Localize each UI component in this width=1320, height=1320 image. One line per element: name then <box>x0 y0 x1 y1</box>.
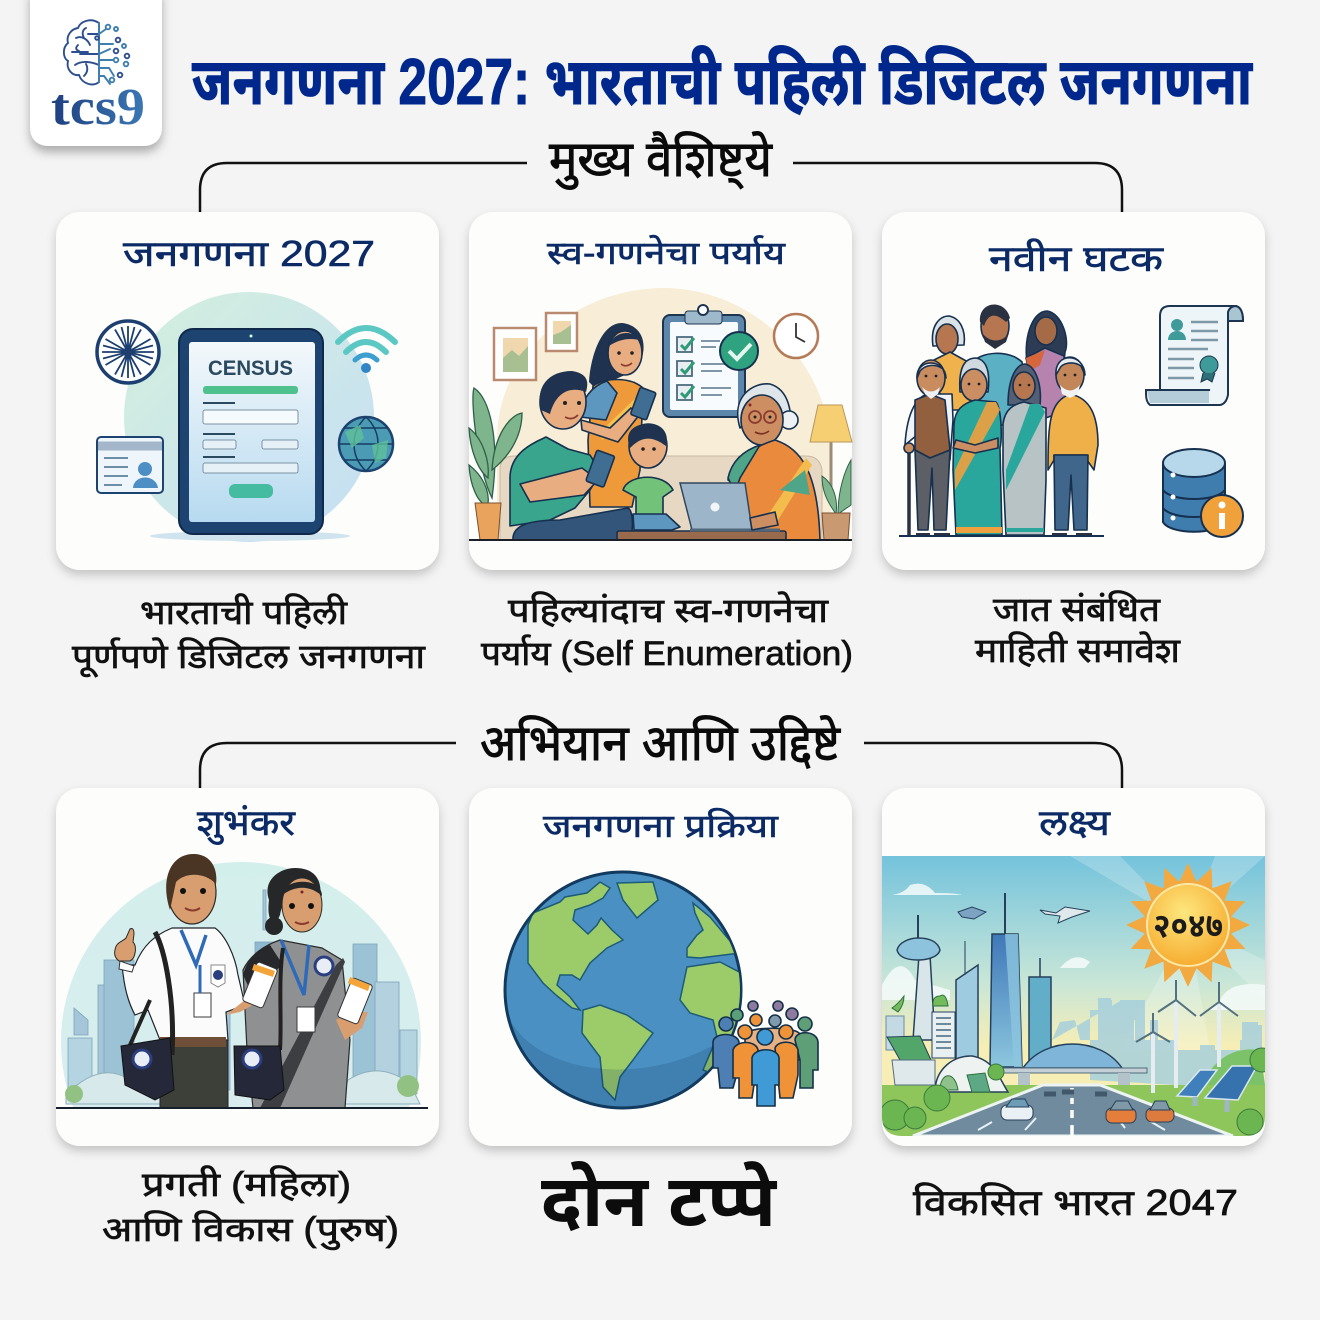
solar roof and dome <box>887 1036 931 1060</box>
planes <box>958 907 986 919</box>
sofa <box>500 456 822 540</box>
clipboard <box>663 315 745 417</box>
caption: census 2027: पूर्णपणे डिजिटल जनगणना <box>72 637 426 677</box>
woman standing <box>589 323 644 388</box>
person blue center <box>752 1050 779 1106</box>
caption: developed India 2047: विकसित भारत 2047 <box>913 1182 1238 1223</box>
caption: new components <box>975 591 1181 670</box>
grandfather in yellow <box>1048 394 1098 470</box>
icon: globe <box>505 872 745 1108</box>
tower <box>913 955 935 1040</box>
card title: शुभंकर <box>197 802 296 845</box>
person orange left <box>733 1042 758 1098</box>
woman <box>1008 364 1040 405</box>
icon: brain circuit <box>64 20 129 84</box>
South America <box>582 1005 653 1100</box>
panel: census process <box>469 788 852 1146</box>
woman mascot <box>243 940 350 1108</box>
Africa <box>680 962 745 1075</box>
illustration: tablet scene: CENSUS <box>208 357 293 380</box>
icon: certificate scroll <box>1146 306 1243 405</box>
plant and pot <box>469 388 522 505</box>
icon: wifi <box>338 328 395 373</box>
person blue left <box>713 1034 739 1088</box>
lamp <box>830 442 832 500</box>
North America <box>528 882 623 1010</box>
caption: mascot: आणि विकास (पुरुष) <box>102 1211 399 1250</box>
clock <box>774 314 818 358</box>
section heading: key features <box>200 131 1122 212</box>
old man <box>905 394 953 460</box>
caption: census 2027: भारताची पहिली <box>140 593 348 632</box>
old woman <box>960 358 989 392</box>
panel: census 2027 <box>56 212 439 570</box>
panel: mascot <box>52 788 444 1156</box>
caption: mascot <box>102 1166 399 1250</box>
icon: group of people <box>713 1001 818 1106</box>
card title: जनगणना प्रक्रिया <box>543 808 779 844</box>
icon: id card <box>97 437 163 493</box>
solar panels <box>1177 1070 1217 1097</box>
sun <box>1126 863 1250 987</box>
person orange right <box>775 1042 798 1098</box>
caption: new components: जात संबंधित <box>993 591 1161 629</box>
icon: database with info <box>1163 449 1243 537</box>
right plant <box>822 460 851 514</box>
clouds <box>882 884 1265 1010</box>
section heading: campaign and objectives: अभियान आणि उद्दिष्टे <box>480 715 841 771</box>
icon: globe <box>339 417 393 471</box>
bridge <box>1023 1044 1122 1068</box>
section heading: key features: मुख्य वैशिष्ट्ये <box>549 131 773 190</box>
caption: census 2027 <box>72 593 426 677</box>
table and laptop <box>617 531 786 540</box>
road <box>913 1085 1233 1136</box>
back row <box>932 316 964 346</box>
card title: जनगणना 2027 <box>123 233 375 274</box>
skyline haze <box>1052 998 1262 1090</box>
logo wordmark: tcs9 <box>51 79 145 136</box>
panel: new components <box>882 212 1265 570</box>
grandma <box>738 384 791 428</box>
trees <box>880 1048 1274 1135</box>
wind turbines <box>1153 1000 1219 1093</box>
caption: self enumeration: पर्याय (Self Enumeration) <box>481 634 853 673</box>
illustration: tablet scene <box>124 292 374 542</box>
caption: mascot: प्रगती (महिला) <box>142 1166 351 1204</box>
card title: स्व-गणनेचा पर्याय <box>547 235 787 271</box>
icon: ashoka chakra <box>97 321 159 383</box>
person green <box>795 1033 818 1088</box>
Europe <box>687 903 740 958</box>
child <box>629 424 667 468</box>
illustration: developed India city <box>880 856 1274 1136</box>
logo badge <box>30 0 162 146</box>
cars <box>1001 1105 1033 1120</box>
card title: नवीन घटक <box>989 238 1165 279</box>
office towers <box>956 965 978 1065</box>
section heading: campaign and objectives <box>200 715 1122 788</box>
man <box>510 437 596 526</box>
illustration: family at home <box>469 288 852 540</box>
caption: self enumeration: पहिल्यांदाच स्व-गणनेचा <box>508 591 829 630</box>
illustration: mascots Pragati and Vikas <box>61 854 421 1107</box>
panel: goal <box>880 788 1274 1146</box>
caption: new components: माहिती समावेश <box>975 631 1181 670</box>
caption: two stages: दोन टप्पे <box>541 1161 778 1242</box>
man mascot <box>122 928 245 1040</box>
Greenland <box>617 882 658 918</box>
illustration: diverse citizens <box>899 305 1104 536</box>
card title: लक्ष्य <box>1039 802 1111 843</box>
grass <box>882 1085 1265 1136</box>
sun year label: २०४७ <box>1153 907 1223 945</box>
panel: self enumeration <box>469 212 852 570</box>
caption: self enumeration <box>481 591 853 673</box>
